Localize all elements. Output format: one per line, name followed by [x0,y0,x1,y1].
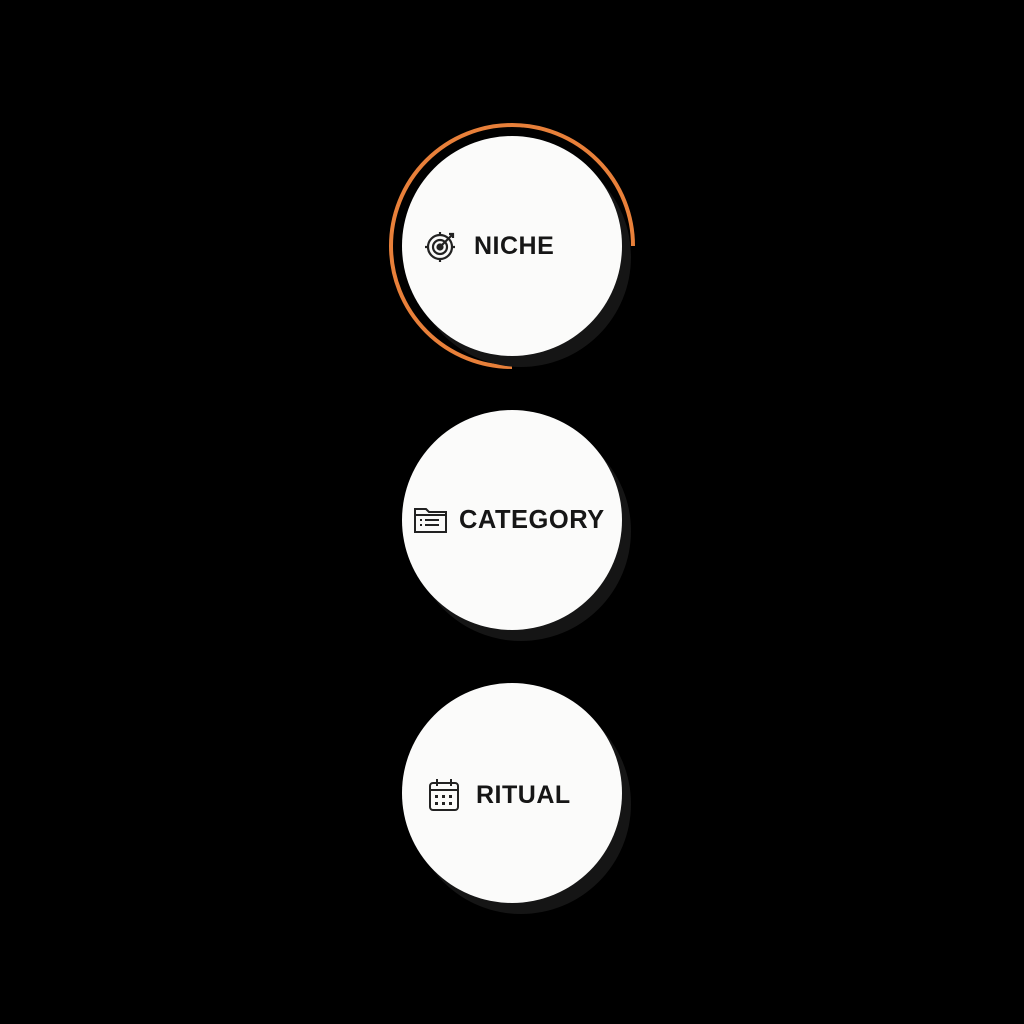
label: category: CATEGORY [459,506,605,534]
label: niche: NICHE [474,232,554,260]
icon: target [425,232,455,262]
circle: niche [402,136,622,356]
icon: folder list [414,508,447,533]
label: ritual [429,779,571,811]
label: ritual: RITUAL [476,780,571,808]
label: niche [425,232,554,262]
circle: category [402,410,622,630]
circle: ritual [402,683,622,903]
icon: calendar [429,779,459,811]
